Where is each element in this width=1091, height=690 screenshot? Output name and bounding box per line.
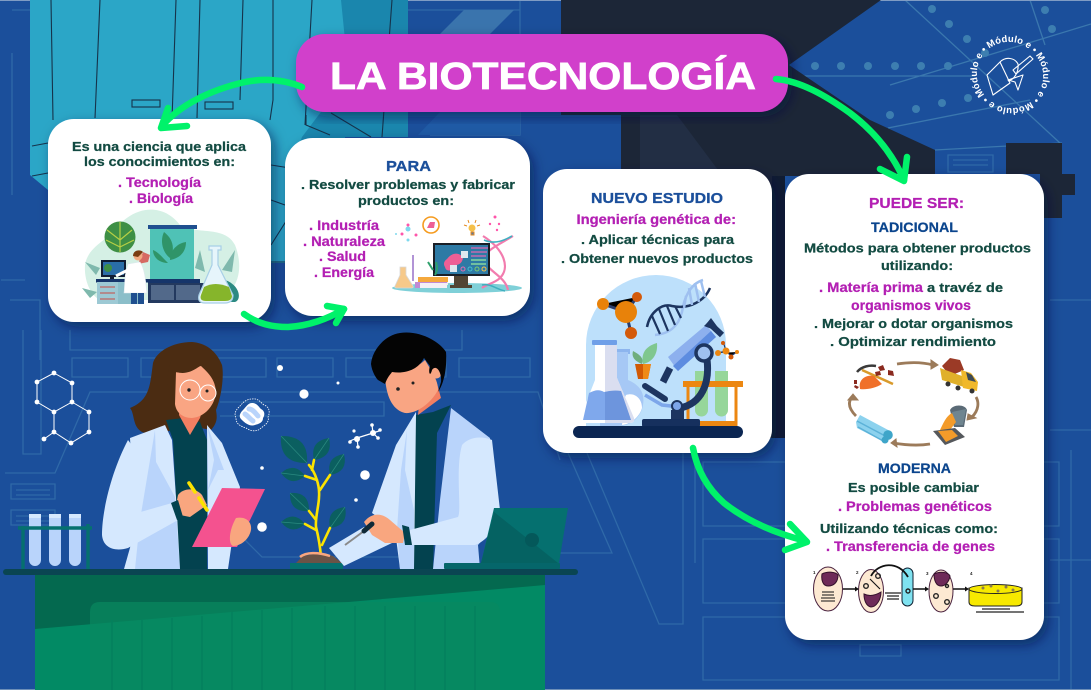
traditional text: Métodos para obtener productos xyxy=(804,240,1031,256)
traditional text: utilizando: xyxy=(881,258,953,273)
icon: bacterium xyxy=(235,399,269,431)
rack with tubes xyxy=(683,371,743,426)
conical flask xyxy=(580,340,634,423)
panel: definition card xyxy=(48,119,271,322)
microscope xyxy=(642,318,722,427)
purpose text: . Salud xyxy=(319,249,366,264)
hair xyxy=(371,333,446,392)
foundry xyxy=(950,406,967,427)
illustration: laboratory with tank and flask xyxy=(82,210,239,304)
pencil xyxy=(189,483,207,510)
panel: purpose card xyxy=(285,138,530,316)
sleeve xyxy=(410,438,500,545)
neck and face xyxy=(179,400,205,435)
modern text: . Transferencia de genes xyxy=(826,539,995,554)
new study text: NUEVO ESTUDIO xyxy=(591,191,723,207)
modern text: Utilizando técnicas como: xyxy=(820,521,998,536)
icon: book and pencil xyxy=(987,56,1033,95)
title pill xyxy=(296,34,788,112)
dark building shape xyxy=(561,0,1075,438)
new study text: . Obtener nuevos productos xyxy=(561,251,753,266)
icon: small molecule xyxy=(348,423,382,449)
logo: Módulo e badge: Módulo e • Módulo e • Módulo e • Módulo e • xyxy=(970,35,1050,115)
panel: new study card xyxy=(543,169,772,453)
diagram: gene transfer: 2 xyxy=(856,570,859,575)
scientist man xyxy=(329,333,500,569)
title: LA BIOTECNOLOGÍA xyxy=(330,54,756,98)
lab coat xyxy=(372,412,416,569)
illustration: microscope and flasks xyxy=(573,275,743,438)
purpose text: productos en: xyxy=(358,193,454,208)
traditional text xyxy=(804,195,1031,349)
purpose text: . Naturaleza xyxy=(303,234,386,249)
glasses xyxy=(180,380,216,401)
purpose text: PARA xyxy=(386,159,432,175)
new study text: . Aplicar técnicas para xyxy=(581,232,735,247)
diagram: gene transfer: 4 xyxy=(970,571,973,576)
definition text: . Biología xyxy=(129,191,194,206)
round flask xyxy=(600,349,643,426)
arrow: title to definition card xyxy=(161,80,302,128)
DNA helix xyxy=(647,280,710,335)
illustration: production cycle xyxy=(848,358,978,447)
plant in pot xyxy=(633,343,657,379)
arrow: title to types card xyxy=(776,79,907,181)
lab table xyxy=(3,569,578,690)
traditional text: . Mejorar o dotar organismos xyxy=(814,316,1013,331)
scene: white molecule and particles xyxy=(35,365,382,532)
test tubes xyxy=(18,514,92,569)
diagram: gene transfer xyxy=(813,565,1024,612)
definition text: Es una ciencia que aplica xyxy=(72,139,247,154)
new study text: Ingeniería genética de: xyxy=(576,212,736,227)
laptop xyxy=(444,508,568,569)
modern text xyxy=(820,461,998,554)
traditional text: a travéz de xyxy=(927,280,1003,295)
neck and face xyxy=(418,380,441,415)
modern text: Es posible cambiar xyxy=(848,480,979,495)
dropper xyxy=(345,531,364,545)
purpose text: . Energía xyxy=(314,265,375,280)
shirt xyxy=(166,418,207,569)
sleeve over plant xyxy=(329,527,392,566)
lab coat xyxy=(124,425,240,569)
cylinders xyxy=(856,415,892,443)
molecule xyxy=(597,292,642,339)
definition text xyxy=(72,139,247,206)
small orange molecule xyxy=(715,341,739,360)
plant xyxy=(281,436,346,569)
traditional text: PUEDE SER: xyxy=(869,195,964,212)
hair back xyxy=(130,342,223,434)
definition text: los conocimientos en: xyxy=(84,154,235,169)
hand xyxy=(364,515,405,543)
traditional text: . Matería prima xyxy=(819,280,924,295)
arrow: definition card to purpose card xyxy=(244,306,344,327)
diagram: gene transfer: 1 xyxy=(813,570,816,575)
microscope base bar xyxy=(573,426,743,438)
traditional text: organismos vivos xyxy=(851,298,971,313)
clipboard xyxy=(192,488,265,547)
diagram: gene transfer: 3 xyxy=(926,571,929,576)
modern text: MODERNA xyxy=(878,461,951,476)
hand holding clipboard xyxy=(230,518,251,546)
purpose text: . Resolver problemas y fabricar xyxy=(301,177,515,192)
modern text: . Problemas genéticos xyxy=(838,499,992,514)
shirt xyxy=(414,405,451,569)
new study text xyxy=(561,191,753,266)
writing hand xyxy=(176,489,207,517)
traditional text: . Optimizar rendimiento xyxy=(830,334,996,349)
panel: types card xyxy=(785,174,1044,640)
purpose text: . Industría xyxy=(309,218,380,233)
teal building shape xyxy=(30,0,408,263)
traditional text: TADICIONAL xyxy=(871,220,958,235)
dump truck xyxy=(942,358,964,376)
scientist woman xyxy=(102,342,265,569)
purpose text xyxy=(301,159,515,280)
pickaxe and helmet xyxy=(862,370,893,384)
arrow: new study card to types card xyxy=(693,448,807,550)
illustration: computer, DNA and flask xyxy=(392,216,522,293)
definition text: . Tecnología xyxy=(118,175,202,190)
